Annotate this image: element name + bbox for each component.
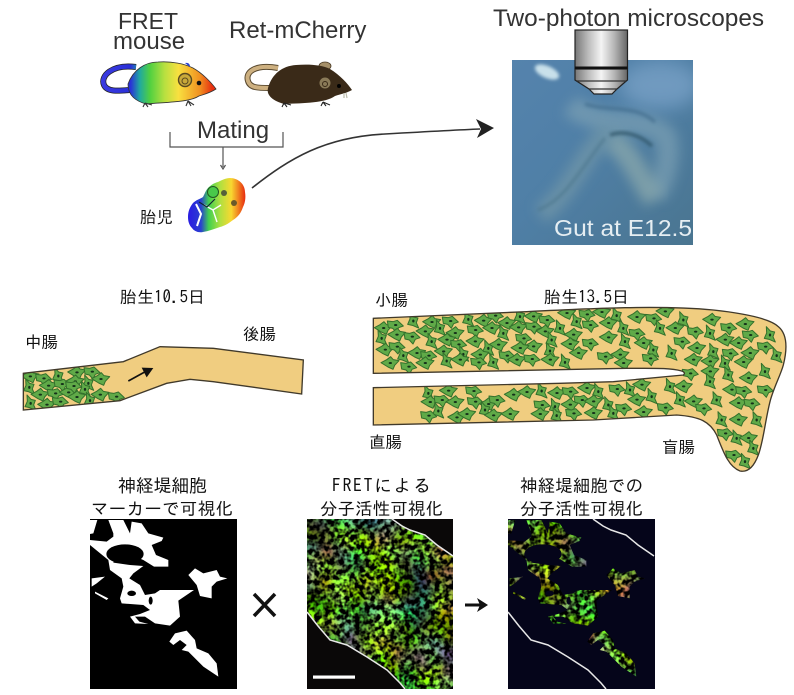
image: binary marker mask [90,519,237,689]
scale bar [313,676,355,679]
caption: neural crest marker: マーカーで可視化 [91,500,233,518]
icon: rainbow FRET mouse [103,62,216,107]
icon: dark Ret-mCherry mouse [247,62,352,107]
title: Two-photon microscopes: Two-photon microscopes [493,5,764,32]
label: mouse: mouse [113,28,185,55]
curved arrow to microscope [252,119,494,188]
panel: gut at embryonic day 13.5 [369,288,786,471]
panel: neural crest marker image [90,476,237,689]
diagram: gut with migrating cells [21,347,303,411]
label: Gut at E12.5: Gut at E12.5 [554,215,692,241]
diagram: gut filled with cells [373,305,786,471]
icon: rainbow embryo [188,178,245,232]
label: Mating: Mating [197,117,269,144]
panel: mating and embryo [103,8,494,232]
icon: objective lens [575,30,628,94]
caption: neural crest marker [91,476,233,518]
label: midgut: 中腸 [25,333,58,350]
label: small intestine: 小腸 [375,291,408,308]
label: embryo: 胎児 [140,208,173,225]
caption: activity in neural crest [520,477,643,518]
caption: activity in neural crest: 分子活性可視化 [520,500,643,518]
arrow: result [465,598,488,612]
heading: E13.5: 胎生13.5日 [544,288,629,306]
image: masked FRET micrograph [508,519,655,689]
caption: activity in neural crest: 神経堤細胞での [520,477,643,495]
heading: E10.5: 胎生10.5日 [120,288,205,306]
arrow: migration direction [128,368,153,381]
label: FRET mouse: FRET [118,8,178,34]
caption: neural crest marker: 神経堤細胞 [118,476,207,495]
label: rectum: 直腸 [369,433,402,450]
symbol: multiply [254,594,275,616]
panel: activity in neural crest cells [508,477,655,689]
label: hindgut: 後腸 [243,325,276,342]
photo: gut at E12.5 [512,60,700,245]
caption: FRET molecular activity: FRETによる [332,477,431,495]
label: Ret-mCherry: Ret-mCherry [229,17,366,44]
caption: FRET molecular activity [320,477,443,518]
panel: gut at embryonic day 10.5 [21,288,303,411]
caption: FRET molecular activity: 分子活性可視化 [320,500,443,518]
panel: FRET activity image [307,477,453,689]
label: cecum: 盲腸 [662,438,695,455]
bracket and arrow: mating [170,132,283,169]
panel: two-photon microscope [493,5,764,245]
image: FRET micrograph [307,519,453,689]
